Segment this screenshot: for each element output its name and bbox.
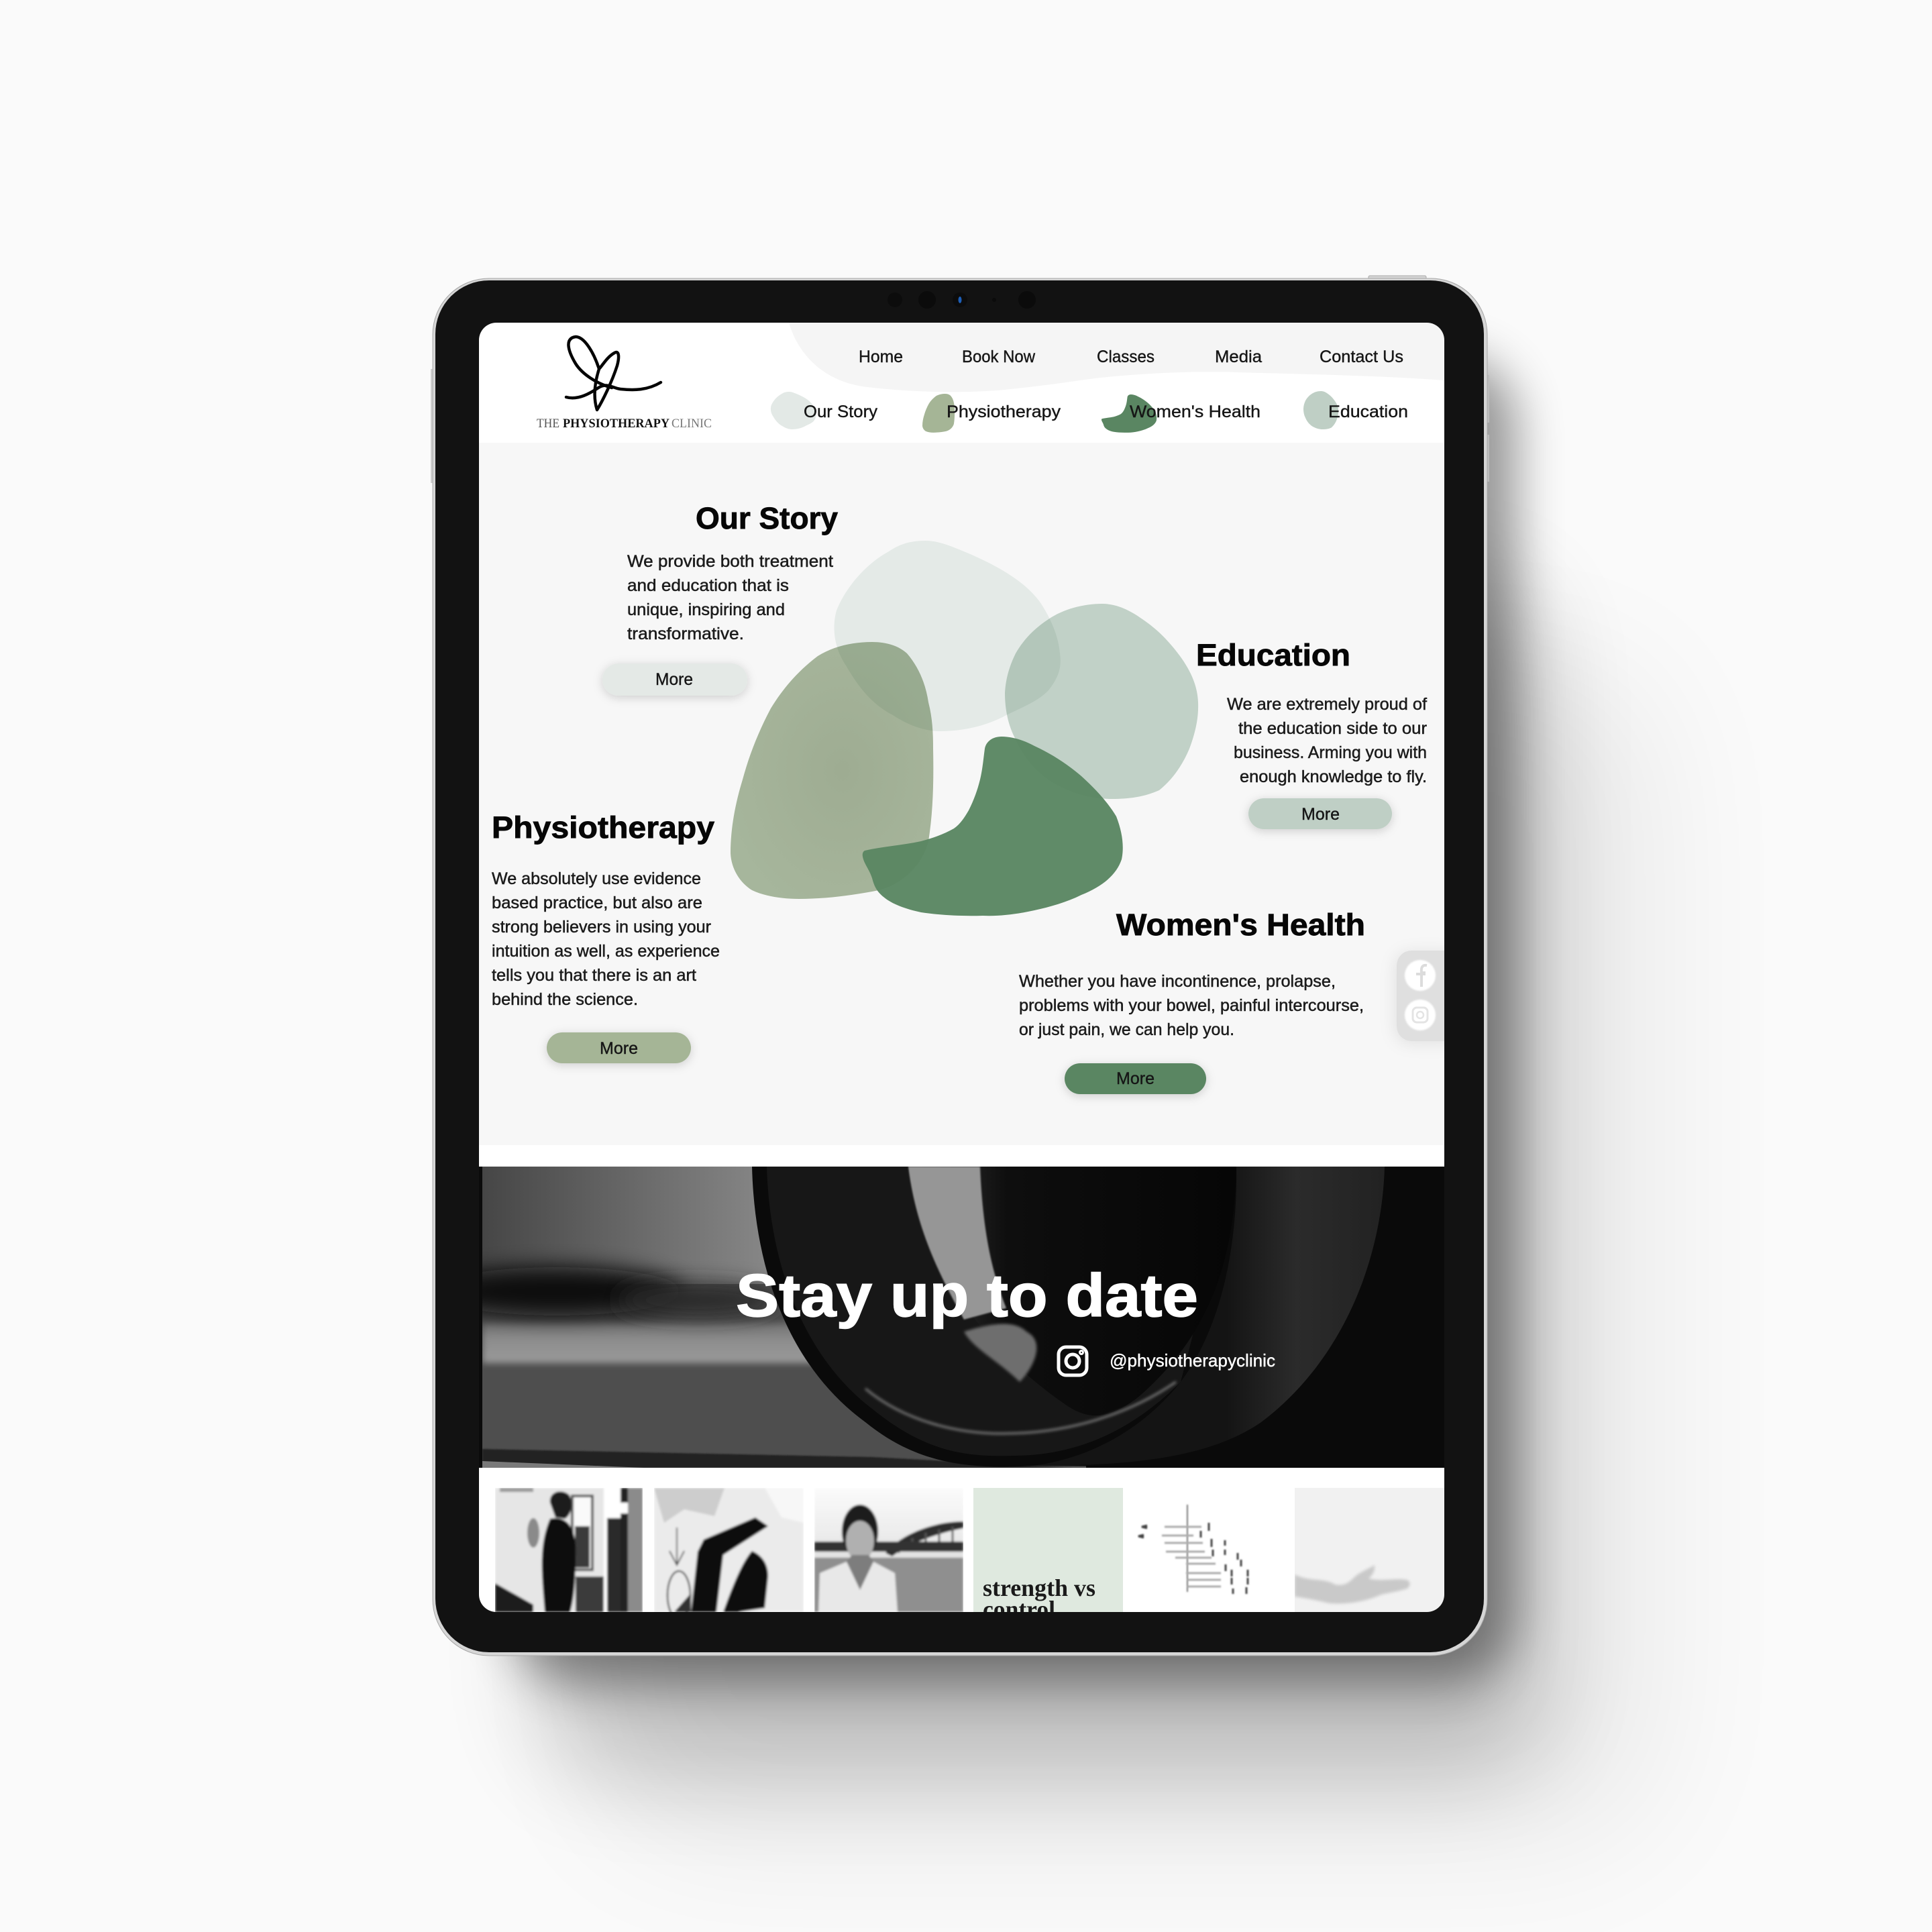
icon: instagram bbox=[1405, 1000, 1436, 1030]
section navigation bbox=[771, 391, 1408, 433]
nav item: Our Story: Our Story bbox=[804, 402, 877, 421]
button: More bbox=[602, 663, 747, 696]
button: More: More bbox=[1301, 805, 1340, 824]
thumbnail 4: strength vs control: control bbox=[983, 1596, 1055, 1623]
text: Physiotherapy body: We absolutely use evidence bbox=[492, 869, 701, 888]
blob: Women's Health bbox=[863, 737, 1123, 916]
heading: Women's Health: Women's Health bbox=[1116, 908, 1365, 942]
camera cluster bbox=[888, 291, 1036, 309]
thumbnail 3: smiling woman with bridge bbox=[814, 1488, 963, 1612]
logo wordmark: PHYSIOTHERAPY bbox=[563, 417, 669, 431]
text: Physiotherapy body: tells you that there is an art bbox=[492, 966, 696, 985]
section: Physiotherapy bbox=[492, 810, 720, 1063]
thumbnail 1: person in doorway bbox=[495, 1488, 643, 1612]
text: Our Story body: We provide both treatment bbox=[627, 552, 833, 571]
logo wordmark: CLINIC bbox=[672, 417, 712, 431]
thumbnail 4: strength vs control: strength vs bbox=[983, 1574, 1095, 1601]
text: Education body bbox=[1227, 695, 1427, 786]
banner photo: yoga wheel bbox=[429, 1167, 1444, 1468]
text: Education body: business. Arming you with bbox=[1234, 743, 1427, 762]
thumbnail 5: exercise diagram bbox=[1123, 1488, 1295, 1612]
top navigation bbox=[859, 347, 1403, 366]
icon: facebook bbox=[1405, 960, 1436, 991]
text: Education body: We are extremely proud of bbox=[1227, 695, 1427, 714]
blob: Our Story bbox=[835, 541, 1061, 731]
button: More: More bbox=[655, 670, 693, 689]
nav item: Physiotherapy bbox=[922, 394, 1061, 433]
text: Women's Health body: Whether you have incontinence, prolapse, bbox=[1019, 972, 1336, 991]
text: Women's Health body bbox=[1019, 972, 1364, 1039]
section: Education bbox=[1196, 638, 1427, 829]
nav item: Women's Health: Women's Health bbox=[1130, 402, 1260, 421]
heading: Our Story: Our Story bbox=[696, 501, 838, 535]
heading: Education: Education bbox=[1196, 638, 1350, 672]
instagram thumbnail strip bbox=[495, 1488, 1444, 1623]
logo wordmark: THE bbox=[537, 417, 559, 431]
nav item: Education: Education bbox=[1328, 402, 1408, 421]
text: Physiotherapy body: behind the science. bbox=[492, 990, 638, 1009]
device drop shadow bbox=[510, 356, 1650, 1838]
button: More bbox=[1065, 1063, 1206, 1094]
section: Women's Health bbox=[1019, 908, 1365, 1094]
button: More: More bbox=[600, 1039, 638, 1058]
text: Our Story body: and education that is bbox=[627, 576, 789, 595]
text: Women's Health body: problems with your bowel, painful intercourse, bbox=[1019, 996, 1364, 1015]
logo wordmark bbox=[537, 417, 712, 431]
button: More: More bbox=[1116, 1069, 1155, 1088]
blob: Physiotherapy bbox=[731, 642, 933, 899]
central blob graphic bbox=[731, 541, 1198, 916]
text: Our Story body: unique, inspiring and bbox=[627, 600, 785, 619]
text: Physiotherapy body bbox=[492, 869, 720, 1009]
blob: Education bbox=[1005, 604, 1198, 799]
button: More bbox=[547, 1032, 691, 1063]
banner: Stay up to date bbox=[429, 1167, 1444, 1468]
logo mark bbox=[566, 337, 661, 410]
text: Physiotherapy body: intuition as well, as experience bbox=[492, 942, 720, 961]
top navigation: Media bbox=[1215, 347, 1262, 366]
tablet device frame bbox=[431, 276, 1489, 1656]
section: Our Story bbox=[602, 501, 838, 696]
text: Our Story body: transformative. bbox=[627, 625, 744, 643]
heading: Physiotherapy: Physiotherapy bbox=[492, 810, 714, 845]
social sidebar bbox=[1397, 951, 1464, 1041]
header wave bbox=[789, 323, 1444, 392]
text: Physiotherapy body: strong believers in using your bbox=[492, 918, 711, 936]
top navigation: Book Now bbox=[962, 347, 1036, 366]
main content panel bbox=[479, 443, 1444, 1145]
text: Women's Health body: or just pain, we can help you. bbox=[1019, 1020, 1234, 1039]
heading: Stay up to date: Stay up to date bbox=[736, 1263, 1198, 1330]
thumbnail 2: pilates legs bbox=[654, 1488, 804, 1619]
logo bbox=[537, 337, 712, 431]
top navigation: Contact Us bbox=[1320, 347, 1403, 366]
text: Physiotherapy body: based practice, but also are bbox=[492, 894, 702, 912]
text: Education body: enough knowledge to fly. bbox=[1240, 767, 1427, 786]
nav item: Education bbox=[1303, 391, 1408, 429]
nav item: Physiotherapy: Physiotherapy bbox=[947, 402, 1061, 421]
button: More bbox=[1248, 798, 1392, 829]
text: Education body: the education side to our bbox=[1238, 719, 1427, 738]
text: instagram handle: @physiotherapyclinic bbox=[1110, 1350, 1275, 1371]
top navigation: Classes bbox=[1097, 347, 1155, 366]
thumbnail 6: open hand bbox=[1295, 1488, 1444, 1612]
nav item: Our Story bbox=[771, 392, 877, 429]
top navigation: Home bbox=[859, 347, 903, 366]
website screen bbox=[429, 323, 1464, 1623]
nav item: Women's Health bbox=[1102, 394, 1260, 433]
icon: instagram bbox=[1059, 1347, 1087, 1375]
thumbnail 4: strength vs control bbox=[973, 1488, 1123, 1623]
text: Our Story body bbox=[627, 552, 833, 643]
